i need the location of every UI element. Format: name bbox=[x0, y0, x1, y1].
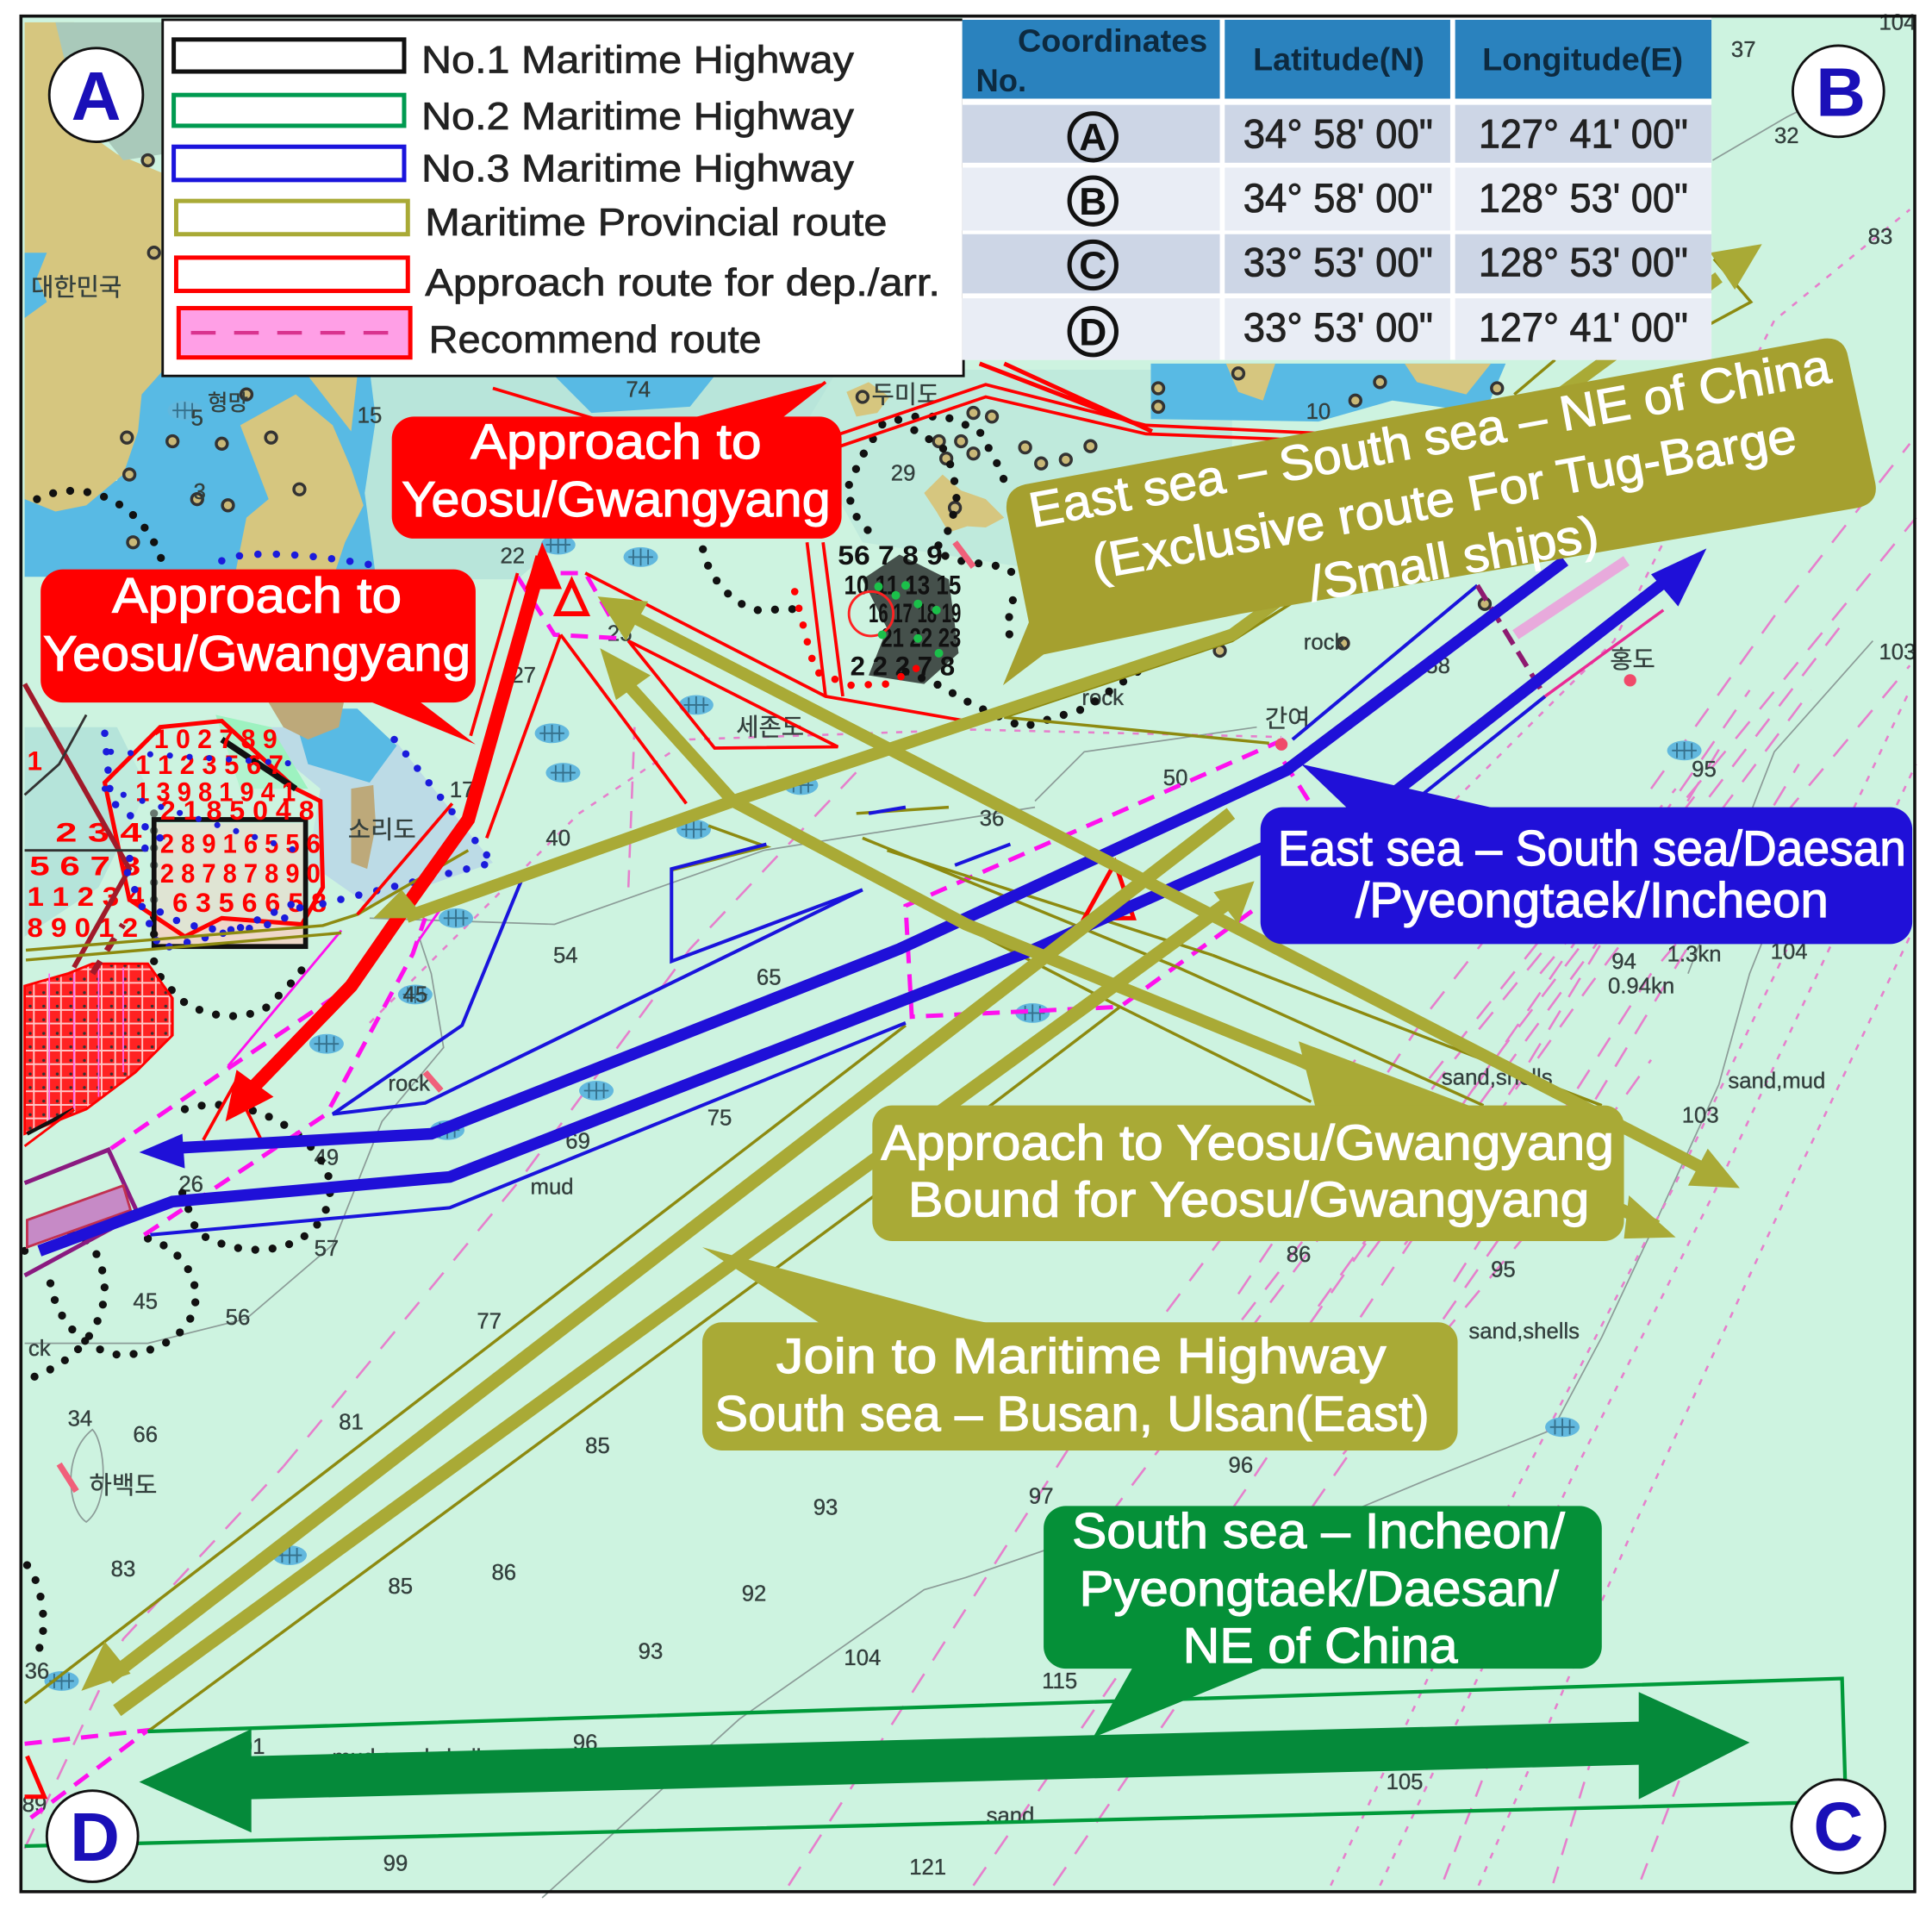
purple separation box bottom left bbox=[25, 1150, 138, 1276]
solid magenta boundaries bbox=[228, 896, 450, 1066]
sounding numbers and seabed labels: 36 bbox=[25, 1660, 49, 1684]
sounding numbers and seabed labels: 15 bbox=[358, 404, 382, 428]
land and shallow water bbox=[25, 22, 1505, 945]
red numbered anchorage area: 2 8 9 1 6 5 5 6 bbox=[160, 829, 321, 859]
black/red route numbers cluster: 16 17 18 19 bbox=[869, 598, 961, 628]
corner marker C: C bbox=[1813, 1787, 1863, 1864]
sounding numbers and seabed labels: 91 bbox=[240, 1735, 265, 1759]
magenta dashed recommended routes bbox=[25, 573, 1324, 1818]
anchorage symbols bbox=[44, 401, 1702, 1691]
sounding numbers and seabed labels: 121 bbox=[909, 1856, 946, 1880]
red numbered anchorage area: 1 1 2 3 5 6 7 bbox=[135, 750, 284, 780]
sounding numbers and seabed labels: mud,sand,shell bbox=[332, 1746, 481, 1770]
sounding numbers and seabed labels: rock bbox=[1081, 686, 1124, 710]
sounding numbers and seabed labels: 형망 bbox=[208, 391, 248, 415]
corner marker A: A bbox=[72, 58, 121, 134]
sounding numbers and seabed labels: 3 bbox=[193, 480, 206, 504]
sounding numbers and seabed labels: 86 bbox=[1287, 1243, 1311, 1267]
legend: No.2 Maritime Highway bbox=[174, 95, 855, 138]
sounding numbers and seabed labels: 0.94kn bbox=[1608, 975, 1674, 999]
sounding numbers and seabed labels: sand bbox=[987, 1804, 1034, 1828]
corner marker C bbox=[1792, 1780, 1885, 1873]
coordinates table: No. bbox=[975, 62, 1026, 98]
sounding numbers and seabed labels: 103 bbox=[1682, 1104, 1719, 1128]
sounding numbers and seabed labels: 17 bbox=[450, 778, 474, 802]
sounding numbers and seabed labels: 56 bbox=[226, 1306, 250, 1330]
red numbered anchorage area: 8 9 0 1 2 bbox=[27, 913, 138, 943]
coordinates table: 34° 58' 00" bbox=[1243, 175, 1433, 221]
corner marker D: D bbox=[70, 1799, 120, 1875]
sounding numbers and seabed labels: 32 bbox=[1774, 124, 1799, 148]
callout: red approach left: Approach to bbox=[112, 569, 402, 624]
sounding numbers and seabed labels: 93 bbox=[639, 1640, 663, 1664]
sounding numbers and seabed labels: 소리도 bbox=[348, 816, 416, 844]
callout: olive tug-barge route: /Small ships) bbox=[1305, 506, 1603, 613]
legend: Recommend route: Recommend route bbox=[429, 319, 762, 361]
legend: Approach route: Approach route for dep./arr. bbox=[425, 262, 940, 304]
sounding numbers and seabed labels: 83 bbox=[111, 1557, 135, 1581]
sounding numbers and seabed labels: 105 bbox=[1387, 1770, 1423, 1794]
sounding numbers and seabed labels: 10 bbox=[1306, 400, 1331, 424]
callout: olive approach and bound for Yeosu: Approach to Yeosu/Gwangyang bbox=[881, 1116, 1614, 1171]
sounding numbers and seabed labels: 세존도 bbox=[736, 714, 804, 742]
sounding numbers and seabed labels: 86 bbox=[492, 1561, 516, 1585]
callout: green South sea route: Pyeongtaek/Daesan/ bbox=[1080, 1562, 1559, 1617]
circled C bbox=[1069, 241, 1116, 289]
sounding numbers and seabed labels: 69 bbox=[565, 1130, 590, 1154]
callout: olive tug-barge route: (Exclusive route For Tug-Barge bbox=[1088, 409, 1800, 590]
sounding numbers and seabed labels: 103 bbox=[1879, 640, 1916, 664]
coordinates table: Coordinates bbox=[1018, 22, 1207, 59]
sounding numbers and seabed labels: 81 bbox=[339, 1411, 364, 1435]
corner marker B: B bbox=[1816, 53, 1866, 130]
circled C: C bbox=[1079, 245, 1106, 287]
sounding numbers and seabed labels: 104 bbox=[844, 1646, 881, 1670]
legend: No.2 Maritime Highway: No.2 Maritime Highway bbox=[421, 96, 855, 138]
corner marker A bbox=[49, 48, 143, 142]
separation line and pink band upper right bbox=[59, 542, 1663, 1491]
circled B: B bbox=[1079, 181, 1106, 223]
sounding numbers and seabed labels: 99 bbox=[383, 1852, 408, 1876]
coordinates table: 33° 53' 00" bbox=[1243, 239, 1433, 284]
red numbered anchorage area: 2 3 4 bbox=[55, 818, 142, 848]
thin blue No.3 highway boundaries bbox=[150, 585, 1545, 1235]
sounding numbers and seabed labels: 홍도 bbox=[1610, 646, 1655, 674]
sounding numbers and seabed labels: ck bbox=[28, 1337, 51, 1361]
sounding numbers and seabed labels: 36 bbox=[980, 807, 1004, 831]
sounding numbers and seabed labels: 49 bbox=[315, 1145, 339, 1170]
sounding numbers and seabed labels: 66 bbox=[133, 1423, 158, 1447]
sounding numbers and seabed labels: sand,mud bbox=[1728, 1070, 1825, 1094]
coordinates table: 127° 41' 00" bbox=[1479, 111, 1688, 157]
red numbered anchorage area: 5 6 7 8 bbox=[29, 851, 140, 881]
sounding numbers and seabed labels: rock bbox=[388, 1071, 430, 1095]
sounding numbers and seabed labels: 54 bbox=[553, 944, 578, 968]
sounding numbers and seabed labels: 93 bbox=[813, 1495, 838, 1519]
sounding numbers and seabed labels: 95 bbox=[1692, 758, 1717, 782]
No.3 thick blue routes with arrows bbox=[40, 548, 1706, 1251]
coordinates table: 127° 41' 00" bbox=[1479, 304, 1688, 350]
sounding numbers and seabed labels: mud bbox=[531, 1176, 574, 1200]
sounding numbers and seabed labels: rock bbox=[1304, 631, 1346, 655]
sounding numbers and seabed labels: 25 bbox=[608, 622, 633, 646]
sounding numbers and seabed labels: 104 bbox=[1879, 10, 1916, 34]
sounding numbers and seabed labels: 89 bbox=[22, 1793, 47, 1817]
sounding numbers and seabed labels: sand,shells bbox=[1468, 1319, 1580, 1344]
legend: Recommend route bbox=[178, 309, 762, 361]
sounding numbers and seabed labels: 96 bbox=[573, 1731, 597, 1755]
callout: blue East sea route: /Pyeongtaek/Incheon bbox=[1356, 873, 1829, 928]
green No.2 highway boundary bbox=[25, 1679, 1846, 1846]
sounding numbers and seabed labels: 85 bbox=[585, 1434, 610, 1458]
sounding numbers and seabed labels: 27 bbox=[511, 664, 536, 688]
sounding numbers and seabed labels: 96 bbox=[1229, 1454, 1253, 1478]
olive thick arrows bbox=[81, 244, 1762, 1711]
sounding numbers and seabed labels: 대한민국 bbox=[31, 274, 122, 302]
sounding numbers and seabed labels: 58 bbox=[1425, 654, 1450, 678]
sounding numbers and seabed labels: 115 bbox=[1042, 1669, 1077, 1694]
callout: olive approach and bound for Yeosu: Bound for Yeosu/Gwangyang bbox=[908, 1172, 1590, 1227]
green thick double arrow bbox=[140, 1692, 1749, 1832]
coordinates table: Latitude(N) bbox=[1253, 41, 1424, 78]
sounding numbers and seabed labels: 75 bbox=[707, 1107, 732, 1131]
callout: olive join to maritime highway bbox=[702, 1247, 1458, 1450]
black/red route numbers cluster: 56 7 8 9 bbox=[838, 540, 943, 571]
legend: No.3 Maritime Highway: No.3 Maritime Highway bbox=[421, 147, 855, 190]
sounding numbers and seabed labels: 45 bbox=[403, 983, 427, 1008]
red thick approach arrow bbox=[226, 542, 562, 1121]
legend: No.1 Maritime Highway: No.1 Maritime Highway bbox=[421, 39, 855, 81]
legend: No.3 Maritime Highway bbox=[174, 147, 855, 190]
sounding numbers and seabed labels: 26 bbox=[178, 1173, 203, 1197]
sounding numbers and seabed labels: 85 bbox=[388, 1575, 413, 1599]
callout: olive tug-barge route bbox=[1003, 339, 1876, 685]
callout: olive join to maritime highway: Join to Maritime Highway bbox=[776, 1329, 1387, 1384]
sounding numbers and seabed labels: 22 bbox=[501, 545, 525, 569]
sounding numbers and seabed labels: 57 bbox=[315, 1237, 339, 1261]
black/red route numbers cluster: 2 2 2 7 8 bbox=[851, 652, 955, 682]
callout: red approach left bbox=[41, 569, 476, 745]
red numbered anchorage area: 2 8 7 8 7 8 9 0 bbox=[160, 858, 321, 889]
legend: Approach route bbox=[176, 258, 940, 304]
red numbered anchorage area: 1 bbox=[27, 746, 42, 777]
callout: blue East sea route bbox=[1261, 764, 1912, 944]
circled D bbox=[1069, 309, 1116, 355]
coordinates table: 33° 53' 00" bbox=[1243, 304, 1433, 350]
olive maritime provincial route thin lines bbox=[25, 259, 1751, 1731]
callout: olive approach and bound for Yeosu bbox=[872, 1041, 1624, 1241]
callout: olive tug-barge route: East sea – South sea – NE of China bbox=[1025, 339, 1835, 539]
sounding numbers and seabed labels: 77 bbox=[477, 1309, 502, 1333]
sounding numbers and seabed labels: 65 bbox=[757, 966, 782, 990]
sounding numbers and seabed labels: 95 bbox=[1491, 1257, 1516, 1282]
red hatched anchorage grid bbox=[25, 924, 172, 1146]
callout: green South sea route bbox=[1044, 1504, 1602, 1737]
callout: red approach top bbox=[392, 382, 842, 539]
sounding numbers and seabed labels: 50 bbox=[1163, 766, 1187, 790]
black/red route numbers cluster bbox=[795, 540, 961, 685]
sounding numbers and seabed labels: 34 bbox=[68, 1407, 92, 1431]
sounding numbers and seabed labels: 29 bbox=[891, 462, 915, 486]
coordinates table bbox=[963, 17, 1711, 360]
sounding numbers and seabed labels: 하백도 bbox=[90, 1472, 157, 1500]
sounding numbers and seabed labels: sand,shells bbox=[1442, 1065, 1553, 1089]
red numbered anchorage area: 1 3 9 8 1 9 4 1 bbox=[135, 777, 296, 807]
coordinates table: Longitude(E) bbox=[1482, 41, 1683, 78]
island and rock symbols bbox=[122, 155, 1503, 656]
callout: green South sea route: South sea – Incheon/ bbox=[1072, 1504, 1565, 1559]
coordinates table: 128° 53' 00" bbox=[1479, 175, 1688, 221]
callout: red approach top: Yeosu/Gwangyang bbox=[402, 472, 831, 527]
circled A: A bbox=[1079, 117, 1106, 159]
legend panel bbox=[163, 20, 963, 376]
red numbered anchorage area: 2 1 8 5 0 4 8 bbox=[160, 795, 315, 826]
legend: Maritime Provincial route: Maritime Provincial route bbox=[425, 202, 887, 244]
callout: red approach left: Yeosu/Gwangyang bbox=[43, 627, 471, 682]
callout: red approach top: Approach to bbox=[471, 415, 762, 470]
thin red approach routes bbox=[25, 364, 1331, 1797]
coordinates table: 128° 53' 00" bbox=[1479, 239, 1688, 284]
corner marker B bbox=[1792, 46, 1884, 137]
red numbered anchorage area: 6 3 5 6 6 5 8 bbox=[172, 888, 327, 918]
sounding numbers and seabed labels: 83 bbox=[1868, 225, 1892, 249]
coordinates table: 34° 58' 00" bbox=[1243, 111, 1433, 157]
legend: No.1 Maritime Highway bbox=[174, 39, 855, 81]
callout: blue East sea route: East sea – South sea/Daesan bbox=[1278, 821, 1906, 877]
sounding numbers and seabed labels: 94 bbox=[1611, 950, 1636, 974]
circled A bbox=[1069, 114, 1116, 160]
callout: olive join to maritime highway: South sea – Busan, Ulsan(East) bbox=[714, 1387, 1430, 1442]
sounding numbers and seabed labels: 74 bbox=[626, 377, 651, 402]
sounding numbers and seabed labels: 92 bbox=[742, 1581, 766, 1606]
red numbered anchorage area bbox=[25, 554, 493, 968]
legend: Maritime Provincial route bbox=[176, 201, 887, 244]
sounding numbers and seabed labels: 45 bbox=[133, 1290, 158, 1314]
circled B bbox=[1069, 178, 1116, 224]
sounding numbers and seabed labels: 간여 bbox=[1265, 706, 1310, 733]
circled D: D bbox=[1079, 311, 1106, 353]
black dotted precaution circles bbox=[25, 416, 1164, 1657]
black/red route numbers cluster: 21 22 23 bbox=[881, 623, 961, 653]
sounding numbers and seabed labels: 1.3kn bbox=[1667, 942, 1722, 966]
black/red route numbers cluster: 10 11 13 15 bbox=[844, 570, 961, 600]
callout: green South sea route: NE of China bbox=[1183, 1619, 1458, 1674]
sounding numbers and seabed labels: 40 bbox=[545, 827, 570, 851]
corner marker D bbox=[47, 1791, 138, 1881]
red numbered anchorage area: 1 0 2 7 8 9 bbox=[154, 724, 277, 754]
sounding numbers and seabed labels: 97 bbox=[1029, 1484, 1054, 1508]
sounding numbers and seabed labels: 104 bbox=[1771, 940, 1808, 964]
sounding numbers and seabed labels: 37 bbox=[1731, 38, 1756, 62]
sounding numbers and seabed labels: 두미도 bbox=[871, 382, 939, 409]
sounding numbers and seabed labels: 5 bbox=[191, 406, 203, 430]
red numbered anchorage area: 1 1 2 3 4 bbox=[27, 882, 145, 912]
